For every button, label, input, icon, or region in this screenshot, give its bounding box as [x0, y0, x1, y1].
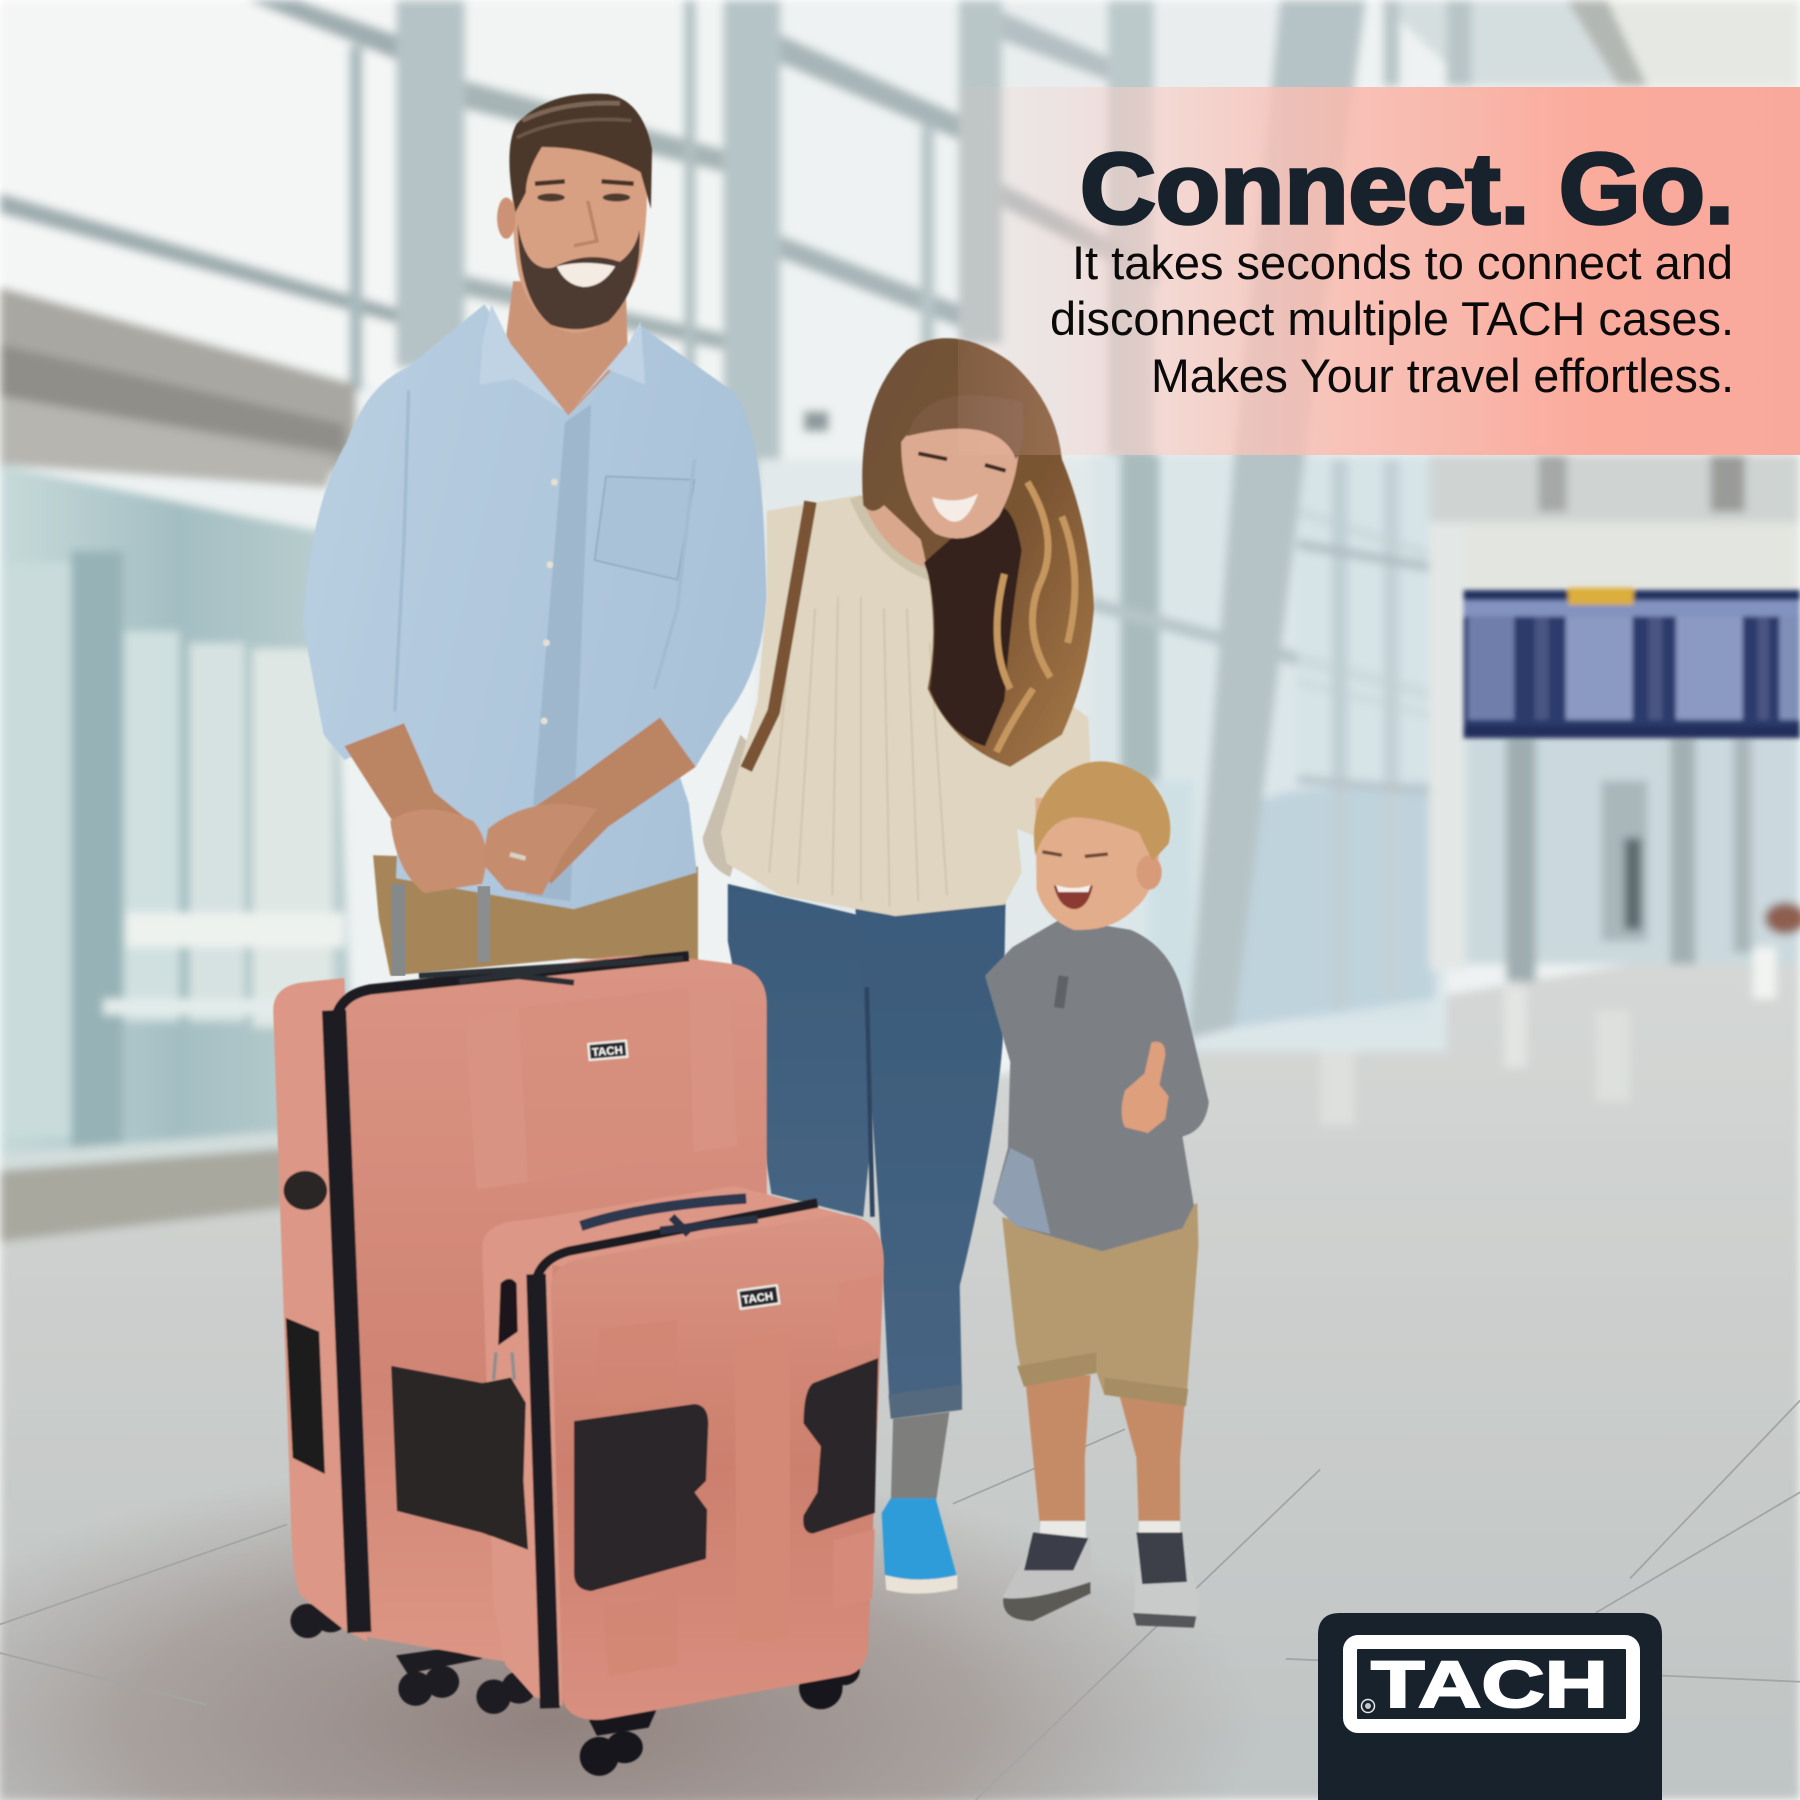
title: Connect. Go.	[1080, 133, 1734, 245]
sweater	[721, 496, 1091, 916]
blue shoe	[882, 1498, 957, 1593]
connector pad bridging both cases	[391, 1366, 528, 1550]
body text: Makes Your travel effortless.	[1151, 349, 1734, 402]
ear	[1136, 855, 1162, 890]
lower left glass	[0, 465, 356, 1171]
flight departures board	[1464, 588, 1800, 738]
left windows	[0, 0, 396, 390]
face	[901, 414, 1019, 539]
small pink suitcase	[391, 1186, 884, 1776]
small case handle	[581, 1198, 746, 1226]
smile	[932, 494, 978, 522]
hair	[1034, 761, 1170, 861]
hair back	[862, 338, 1094, 767]
large case raised panels	[465, 1008, 528, 1189]
logo badge: TACH	[591, 1045, 623, 1059]
logo outline	[1350, 1642, 1633, 1726]
side lock tag	[284, 1171, 327, 1210]
floor reflection under luggage	[0, 1504, 1192, 1800]
person: boy	[985, 761, 1209, 1628]
logo badge	[587, 1039, 629, 1061]
person: woman	[703, 338, 1094, 1594]
nose	[574, 201, 597, 246]
pocket	[595, 476, 695, 580]
shoulder strap	[746, 502, 810, 769]
right jeans leg	[855, 895, 1006, 1406]
body text: disconnect multiple TACH cases.	[1050, 292, 1734, 345]
wall band	[0, 287, 356, 482]
mid glass behind people	[758, 455, 1088, 954]
forearms	[344, 722, 465, 820]
ring	[509, 852, 526, 861]
eyes	[918, 453, 1006, 471]
luggage handle rods	[391, 884, 490, 976]
large case straps	[419, 959, 683, 983]
large pink suitcase	[273, 956, 767, 1714]
henley placket	[1054, 975, 1069, 1009]
arm shadow lines	[395, 390, 695, 712]
small case raised panels	[735, 1332, 790, 1641]
boy legs	[1025, 1375, 1091, 1527]
slanted pillar	[1188, 0, 1366, 1039]
beard	[518, 224, 640, 329]
top right ceiling	[1611, 0, 1800, 86]
floor	[0, 936, 1800, 1800]
small case wheels	[580, 1655, 860, 1776]
large case front	[344, 956, 767, 1665]
small case lock	[498, 1279, 518, 1345]
person: man	[303, 94, 767, 976]
neck	[505, 281, 629, 427]
left sneaker	[1003, 1533, 1093, 1621]
shirt	[303, 304, 767, 909]
head	[512, 132, 647, 333]
collar	[480, 304, 565, 411]
left connector pad	[574, 1404, 708, 1591]
large case side	[273, 978, 367, 1642]
head	[1035, 798, 1162, 930]
boy eyes	[1042, 852, 1108, 856]
chest	[861, 496, 947, 574]
large case wheels	[290, 1604, 536, 1714]
central columns and windows	[396, 0, 465, 367]
sock	[891, 1412, 949, 1504]
large case zipper	[335, 956, 689, 1027]
small case front	[551, 1215, 884, 1720]
sweater texture	[769, 597, 947, 907]
socks	[1040, 1521, 1086, 1538]
laughing mouth	[1054, 885, 1093, 909]
small case zipper	[535, 1203, 817, 1291]
shirt buttons	[541, 479, 558, 724]
neckline	[855, 497, 955, 582]
shorts	[1002, 1203, 1198, 1406]
shirt	[985, 918, 1209, 1251]
panel: headline banner	[958, 87, 1800, 455]
hall back	[1429, 455, 1800, 523]
side connector pad	[286, 1318, 325, 1474]
hair	[509, 94, 652, 212]
left jeans leg	[728, 884, 872, 1217]
small case side	[482, 1217, 562, 1706]
bag	[703, 735, 763, 877]
body text	[1050, 236, 1734, 402]
logo badge	[737, 1284, 781, 1310]
small case top	[505, 1186, 844, 1268]
logo badge: TACH	[742, 1291, 774, 1307]
front hair lock	[907, 395, 1024, 459]
jeans cuff	[889, 1384, 962, 1419]
window mullion diagonal	[0, 193, 396, 324]
leg divide	[867, 987, 872, 1217]
logo wordmark: TACH	[1371, 1647, 1608, 1721]
smile	[557, 263, 615, 287]
thumbs up hand	[1122, 1042, 1169, 1133]
undershirt patch	[993, 1148, 1050, 1234]
dark hair	[924, 505, 1022, 746]
placket	[526, 404, 591, 901]
hands	[390, 809, 486, 893]
light hair strands	[996, 482, 1075, 752]
registered mark	[1362, 1700, 1374, 1712]
trousers	[373, 855, 698, 976]
floor tile lines	[0, 1401, 1800, 1800]
logo badge: TACH	[1318, 1613, 1662, 1800]
right sneaker	[1134, 1533, 1200, 1624]
eyes	[537, 193, 565, 201]
body text: It takes seconds to connect and	[1072, 236, 1733, 289]
ear	[497, 197, 515, 239]
right connector pad	[803, 1358, 878, 1534]
